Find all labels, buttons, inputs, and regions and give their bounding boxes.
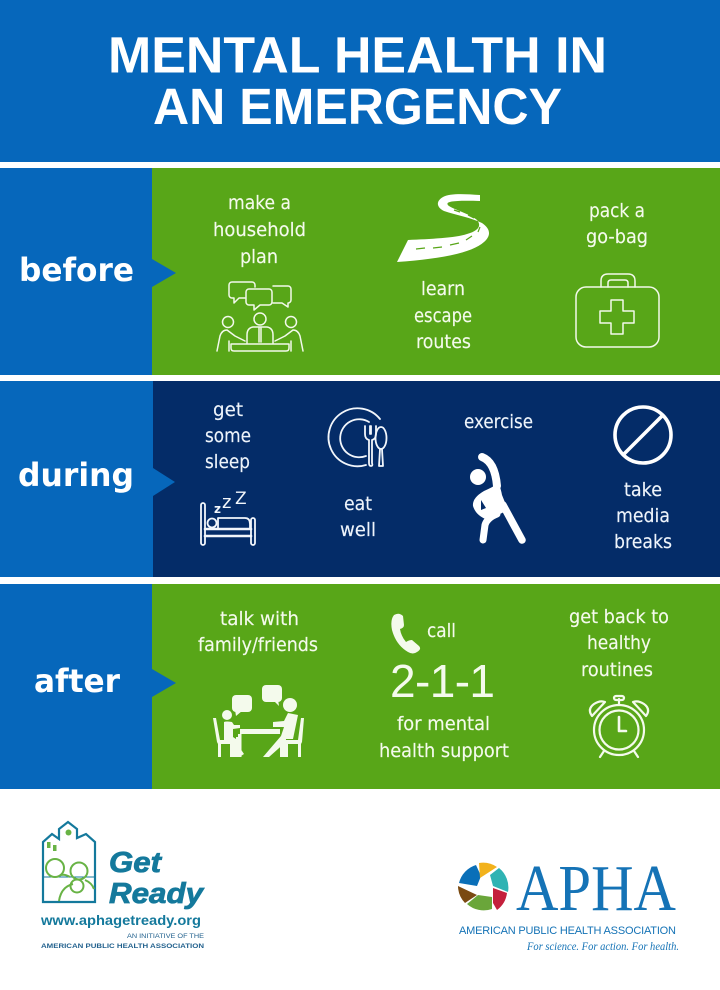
text: learn escape routes: escape [414,305,472,327]
logo name: AMERICAN PUBLIC HEALTH ASSOCIATION [459,925,676,937]
text: call: call [427,620,456,642]
text: learn escape routes: learn [421,278,465,300]
icon: family meeting [217,282,303,351]
icon: bed with sleeper: z [214,502,221,516]
text: for mental health support [379,713,509,762]
logo tagline: AN INITIATIVE OF THE [127,934,204,940]
logo mark: house [43,822,95,902]
heading: during: during [18,456,134,494]
logo text: APHA: APHA [516,852,676,925]
text: pack a go-bag [586,200,648,248]
text: exercise: exercise [464,411,533,433]
icon: alarm clock [590,696,648,757]
text: get back to healthy routines: healthy [587,632,651,654]
icon: plate and cutlery [328,408,386,466]
text: talk with family/friends [198,608,318,656]
text: get some sleep [205,399,251,473]
icon: no symbol [615,407,671,463]
logo tagline: AMERICAN PUBLIC HEALTH ASSOCIATION [41,943,204,950]
heading: after: after [34,662,120,700]
text: learn escape routes [414,278,472,353]
text: get back to healthy routines: routines [581,659,653,681]
text: take media breaks: media [616,505,670,527]
logo tagline: For science. For action. For health. [526,941,679,953]
text: take media breaks: take [624,479,662,501]
text: get back to healthy routines: get back to [569,606,669,628]
title banner: MENTAL HEALTH IN [108,26,607,84]
text: eat well: well [340,519,376,541]
icon: winding road [397,194,489,262]
title banner [0,0,720,162]
text: get back to healthy routines [569,606,669,681]
text: pack a go-bag: pack a [589,200,645,222]
logo tagline [41,934,204,950]
number: 2-1-1: 2-1-1 [390,655,495,707]
text: take media breaks [614,479,672,553]
logo: APHA [458,852,679,953]
icon: bed with sleeper: z [222,492,231,513]
text: make a household plan: household [213,219,306,241]
text: take media breaks: breaks [614,531,672,553]
text: talk with family/friends: family/friends [198,634,318,656]
logo url: www.aphagetready.org [40,912,201,928]
icon: first aid kit [576,274,659,347]
icon: two people talking at a table [213,685,304,757]
text: learn escape routes: routes [416,331,471,353]
text: eat well: eat [344,493,372,515]
icon: bed with sleeper [201,489,255,545]
text: make a household plan: plan [240,246,278,268]
text: eat well [340,493,376,541]
text: for mental health support: for mental [397,713,490,735]
icon: telephone [391,614,420,654]
text: get some sleep: some [205,425,251,447]
panel: during [0,381,720,577]
logo text: Get Ready: Ready [109,878,205,910]
text: make a household plan: make a [228,192,291,214]
text: get some sleep: sleep [205,451,250,473]
logo text: Get Ready [109,847,205,910]
panel: after [0,584,720,789]
logo text: Get Ready: Get [109,847,162,879]
icon: bed with sleeper: Z [235,489,247,509]
heading: before: before [19,251,134,289]
text: get some sleep: get [213,399,243,421]
panel: before [0,168,720,375]
title banner: AN EMERGENCY [153,78,562,135]
text: for mental health support: health support [379,740,509,762]
icon: stretching figure [470,457,522,540]
text: talk with family/friends: talk with [220,608,299,630]
logo mark: colour wheel [458,863,508,910]
text: make a household plan [213,192,306,268]
text: pack a go-bag: go-bag [586,226,648,248]
logo: Get Ready [40,822,205,950]
